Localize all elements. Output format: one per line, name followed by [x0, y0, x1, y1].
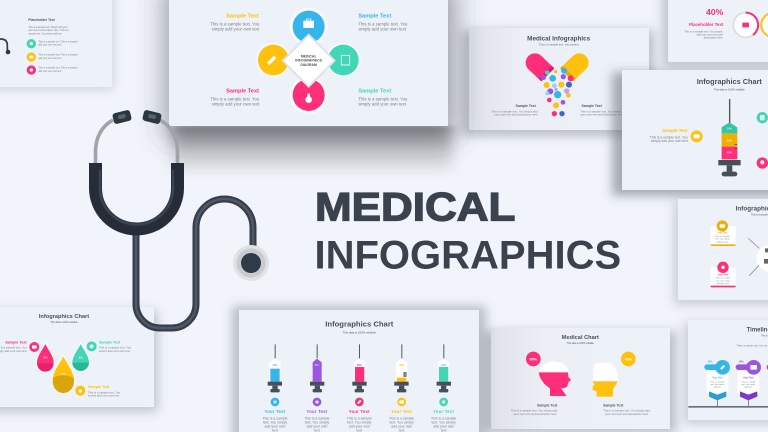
icon: syringe: 30%	[727, 138, 733, 142]
center diamond label: MEDICAL	[301, 54, 317, 58]
panel: medical infographics diagram: simply add your own text	[212, 27, 260, 32]
syringe: blue: 70%	[273, 365, 278, 367]
panel: top-right progress rings: description here	[704, 36, 723, 40]
syringe: teal: add your own	[433, 425, 454, 429]
panel: medical chart heads: This is a sample text. You simply add	[603, 409, 650, 413]
node: blue medical kit	[290, 8, 328, 46]
panel: top-right progress rings: 40%	[706, 7, 724, 17]
panel: capsule medical infographics: Sample Text	[516, 104, 537, 108]
panel: capsule medical infographics	[462, 28, 654, 136]
syringe: yellow: Your Text	[391, 409, 412, 414]
panel: left water drop chart: simply add your own text	[99, 349, 130, 353]
panel: top-right progress rings: add your own text and	[697, 33, 723, 37]
panel: right cards diagram	[674, 199, 768, 305]
syringe: teal: Your Text	[433, 409, 454, 414]
panel: right cards diagram: text. You simply	[716, 279, 730, 282]
timeline item 1: This is a sample	[710, 381, 725, 383]
panel: medical infographics diagram: This is a sample text. You	[358, 97, 408, 102]
panel: top-left placeholder list: This is a sample text. Simply add your	[28, 26, 68, 29]
panel: medical chart heads: Sample Text	[537, 404, 558, 408]
syringe: blue: add your own	[265, 425, 286, 429]
panel: right cards diagram: This is a sample	[715, 236, 730, 238]
panel: left water drop chart: This is a sample text. You	[88, 390, 120, 394]
timeline item 1: text. You simply	[710, 383, 724, 386]
panel: right cards diagram: This is a sample	[716, 278, 731, 280]
panel: syringe infographics chart: Sample Text	[662, 128, 688, 133]
panel: left water drop chart: Sample Text	[5, 340, 27, 344]
heading: Medical Infographics: Medical Infographics	[527, 35, 591, 42]
panel: medical infographics diagram: This is a sample text. You	[210, 97, 260, 102]
panel: medical chart heads: your own text and description here	[513, 412, 557, 416]
syringe: purple	[304, 344, 330, 432]
timeline item 2: add your	[744, 386, 753, 389]
icon: yellow drop: 40%	[61, 374, 66, 376]
panel: top-left placeholder list: sample text. You simply add text	[28, 32, 62, 35]
panel: medical infographics diagram: simply add your own text	[358, 102, 407, 107]
panel: top-left placeholder list	[0, 0, 114, 90]
panel: syringe infographics chart	[612, 70, 768, 196]
panel: top-right progress rings: Placeholder Text	[689, 22, 724, 27]
icon: open capsule	[526, 53, 589, 116]
node: pink flask	[290, 76, 328, 114]
node: yellow syringe	[256, 43, 291, 77]
panel: bottom syringes chart: This data is 100% editable	[343, 331, 376, 335]
timeline item 1	[704, 360, 730, 400]
panel: top-left placeholder list: own text and description here. This is a	[28, 29, 69, 32]
panel: left water drop chart	[0, 307, 158, 412]
panel: medical chart heads: your own text and description here	[605, 412, 649, 416]
panel: medical infographics diagram	[165, 0, 455, 138]
syringe: purple: add your own	[307, 425, 328, 429]
timeline item 2: Your Text	[743, 377, 754, 380]
panel: right cards diagram: Your Text	[717, 232, 728, 235]
panel: medical chart heads: Sample Text	[603, 404, 624, 408]
heading: Medical Chart: Medical Chart	[562, 335, 599, 341]
panel: top-left placeholder list: This is a sample text. This is a sample	[38, 40, 78, 43]
syringe: purple: This is a sample	[304, 417, 330, 421]
panel: top-left placeholder list: add your own text and	[38, 57, 62, 60]
syringe: blue: Your Text	[265, 409, 286, 414]
panel: bottom syringes chart	[232, 306, 486, 432]
panel: capsule medical infographics: Sample Text	[582, 104, 603, 108]
panel: left water drop chart: This data is 100% editable	[50, 321, 78, 324]
syringe: pink: Your Text	[349, 409, 370, 414]
syringe: purple: text. You simply	[305, 421, 329, 425]
chart: right head 40%: 40%	[625, 357, 633, 361]
chart: left head 60%: 60%	[530, 357, 538, 361]
panel: top-left placeholder list: Placeholder Text	[28, 18, 56, 22]
panel: medical infographics diagram: This is a sample text. You	[358, 22, 408, 27]
center diamond label	[281, 33, 336, 88]
syringe: teal: 80%	[441, 365, 447, 367]
timeline item 2: This is a sample	[741, 381, 756, 383]
timeline item 1: 22%	[708, 361, 713, 363]
syringe: yellow: 20%	[399, 365, 405, 367]
panel: syringe infographics chart: This data is 100% editable	[714, 87, 745, 91]
syringe: yellow: text. You simply	[390, 421, 414, 425]
heading: Infographics Chart: Infographics Chart	[697, 77, 762, 86]
panel: medical infographics diagram: Sample Text	[358, 13, 391, 19]
syringe: purple: 90%	[315, 365, 320, 367]
panel: medical infographics diagram: This is a sample text. You	[210, 22, 260, 27]
panel: right cards diagram: add your own	[716, 240, 728, 243]
icon: pink drop: 30%	[43, 358, 48, 360]
syringe: blue: text. You simply	[263, 421, 287, 425]
timeline item 2: 36%	[739, 361, 745, 363]
syringe: pink	[347, 344, 372, 432]
icon: syringe: 30%	[727, 127, 733, 131]
timeline item 1: add your	[713, 386, 722, 389]
panel: timeline	[684, 320, 768, 424]
syringe: blue: This is a sample	[262, 417, 288, 421]
syringe: pink: This is a sample	[347, 417, 372, 421]
panel: medical infographics diagram: Sample Text	[226, 13, 259, 19]
heading: Infographics Chart: Infographics Chart	[325, 320, 394, 329]
syringe: yellow: This is a sample	[389, 417, 414, 421]
syringe: yellow	[389, 344, 414, 432]
panel: right cards diagram: add your own	[717, 282, 729, 285]
syringe: yellow: add your own	[391, 425, 412, 429]
panel: syringe infographics chart: This is a sample text. You	[650, 135, 688, 139]
panel: medical chart heads: This data is 100% editable	[567, 342, 595, 345]
panel: left water drop chart: Sample Text	[88, 385, 110, 389]
panel: syringe infographics chart: simply add your own text	[651, 139, 688, 143]
icon: stethoscope	[96, 109, 269, 328]
panel: capsule medical infographics: your own text and description here	[494, 113, 538, 117]
panel: left water drop chart: simply add your own text	[88, 394, 119, 398]
icon: syringe	[718, 99, 741, 176]
panel: top-right progress rings	[662, 0, 768, 68]
panel: medical infographics diagram: Sample Text	[226, 88, 259, 94]
icon: teal drop: 30%	[78, 357, 83, 359]
panel: medical infographics diagram: simply add your own text	[212, 102, 260, 107]
title: INFOGRAPHICS	[314, 234, 621, 278]
panel: right cards diagram: Your Text	[718, 273, 728, 276]
panel: medical chart heads	[484, 328, 676, 432]
panel: capsule medical infographics: This is a sample text. You simply add	[580, 109, 627, 113]
timeline item 1: Your Text	[712, 377, 723, 380]
center diamond label: DIAGRAM	[300, 63, 317, 67]
panel: left water drop chart: Sample Text	[99, 340, 121, 344]
syringe: teal: text. You simply	[432, 421, 456, 425]
syringe: pink: add your own	[349, 425, 370, 429]
panel: top-left placeholder list: This is a sample text. This is a sample	[38, 54, 78, 57]
node: teal clipboard	[326, 43, 361, 77]
panel: top-left placeholder list: add your own text and	[38, 44, 62, 47]
panel: capsule medical infographics: This is a sample text. You simply add	[491, 109, 538, 113]
timeline item 2	[736, 360, 761, 400]
panel: right cards diagram: text. You simply	[715, 238, 729, 241]
icon: syringe: 40%	[727, 151, 733, 155]
panel: left water drop chart: This is a sample text. You	[99, 346, 131, 350]
panel: right cards diagram: This is a sample	[751, 215, 768, 217]
syringe: purple: Your Text	[307, 409, 328, 414]
panel: top-left placeholder list: add your own text and	[38, 70, 62, 73]
syringe: pink: text. You simply	[347, 421, 372, 425]
title: MEDICAL	[315, 184, 515, 229]
panel: capsule medical infographics: your own text and description here	[580, 113, 624, 117]
syringe: blue	[262, 344, 288, 432]
title	[314, 184, 621, 278]
drop shadow under diagram panel	[172, 126, 452, 178]
syringe: pink: 80%	[357, 365, 363, 367]
syringe: teal	[431, 344, 456, 432]
panel: medical infographics diagram: simply add your own text	[358, 27, 407, 32]
panel: top-left placeholder list: This is a sample text. This is a sample	[38, 67, 78, 70]
panel: medical chart heads: This is a sample text. You simply add	[511, 409, 558, 413]
center diamond label: INFOGRAPHICS	[295, 59, 323, 63]
panel: timeline: This is a sample text. You can	[737, 344, 768, 347]
panel: capsule medical infographics: This is a sample text. You content	[539, 42, 579, 46]
panel: medical infographics diagram: Sample Text	[358, 88, 391, 94]
panel: top-right progress rings: This is a sample text. You simply	[684, 30, 723, 34]
timeline item 2: text. You simply	[741, 383, 755, 386]
syringe: teal: This is a sample	[431, 417, 456, 421]
heading: Infographics Chart: Infographics Chart	[39, 314, 89, 320]
